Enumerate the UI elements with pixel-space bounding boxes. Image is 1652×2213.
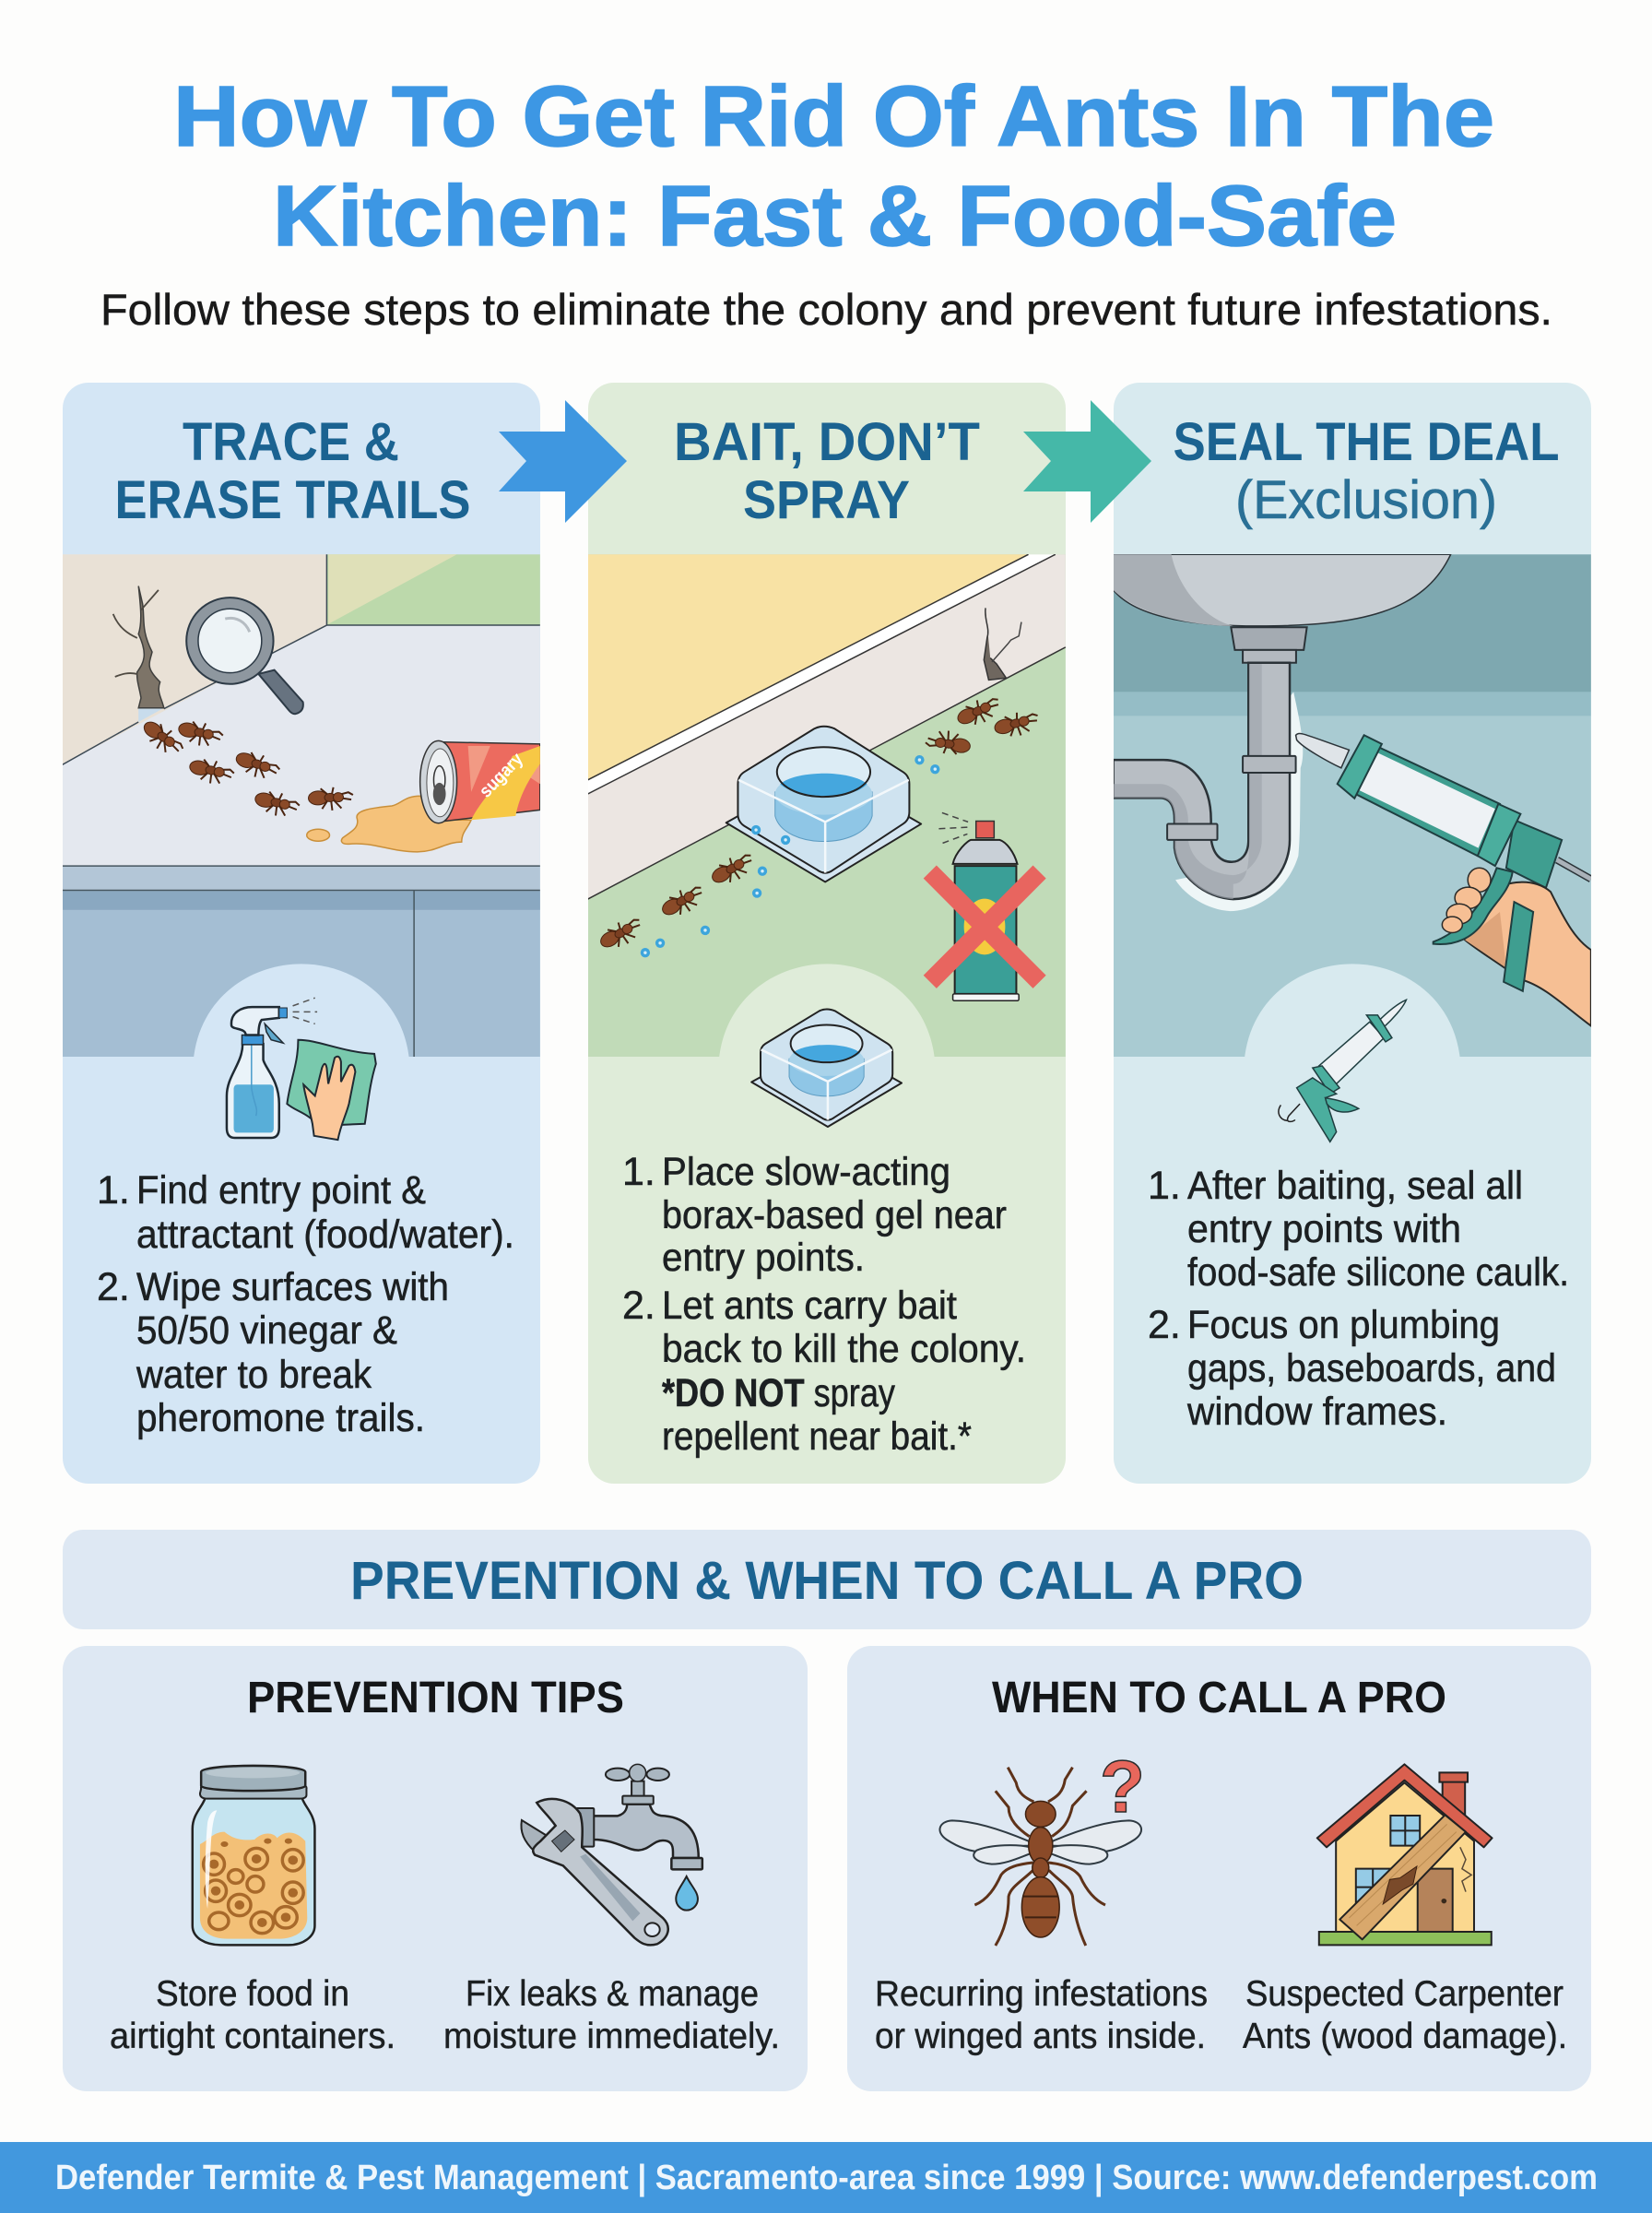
illustration: sink pipe and caulk gun — [1114, 554, 1591, 1059]
caption: fix leaks: Fix leaks & manage — [466, 1974, 759, 2014]
steps list: food-safe silicone caulk. — [1187, 1250, 1569, 1295]
steps list: 2. — [97, 1265, 130, 1309]
steps list: pheromone trails. — [136, 1396, 425, 1440]
panel: trace and erase trails — [63, 383, 540, 1484]
caption: recurring infestations: or winged ants inside. — [875, 2017, 1206, 2056]
caption: carpenter ants — [1243, 1974, 1567, 2056]
steps list: Focus on plumbing — [1187, 1303, 1500, 1347]
steps list: 1. — [97, 1168, 130, 1213]
heading: seal the deal (exclusion): (Exclusion) — [1235, 470, 1497, 530]
panel background — [63, 1646, 808, 2091]
steps list: water to break — [136, 1353, 372, 1397]
caption: recurring infestations: Recurring infestations — [875, 1974, 1208, 2014]
steps list: 50/50 vinegar & — [136, 1308, 397, 1353]
heading: prevention tips: PREVENTION TIPS — [247, 1674, 624, 1722]
heading: seal the deal (exclusion): SEAL THE DEAL — [1173, 412, 1560, 472]
icon: small caulk gun — [1279, 1000, 1406, 1142]
caption: recurring infestations — [875, 1974, 1208, 2056]
subtitle: Follow these steps to eliminate the colony and prevent future infestations. — [100, 285, 1552, 334]
icon: spray bottle and cloth — [227, 998, 376, 1140]
caption: carpenter ants: Ants (wood damage). — [1243, 2017, 1567, 2056]
illustration: bait station and baseboard — [588, 554, 1066, 1059]
title: Kitchen: Fast & Food-Safe — [273, 168, 1397, 264]
icon: winged ant with question mark — [939, 1746, 1145, 1946]
heading: trace and erase trails — [114, 412, 470, 530]
steps list: entry points. — [662, 1236, 865, 1280]
caption: store food: Store food in — [156, 1974, 349, 2014]
steps list: Let ants carry bait — [662, 1284, 957, 1328]
card background blue — [63, 383, 540, 1484]
steps list — [1148, 1164, 1569, 1434]
caption: fix leaks: moisture immediately. — [443, 2017, 780, 2056]
card background teal — [1114, 383, 1591, 1484]
steps list: attractant (food/water). — [136, 1213, 514, 1257]
illustration: kitchen counter with ant trail — [63, 554, 540, 1058]
steps list: 2. — [1148, 1303, 1181, 1347]
heading: when to call a pro: WHEN TO CALL A PRO — [992, 1674, 1446, 1722]
card background green — [588, 383, 1066, 1484]
heading: seal the deal (exclusion) — [1173, 412, 1560, 530]
steps list: After baiting, seal all — [1187, 1164, 1523, 1208]
steps list: back to kill the colony. — [662, 1327, 1026, 1371]
steps list: Find entry point & — [136, 1168, 426, 1213]
caption: store food — [110, 1974, 395, 2056]
icon: wrench and leaky faucet — [521, 1764, 702, 1945]
caption: store food: airtight containers. — [110, 2017, 395, 2056]
caption: fix leaks — [443, 1974, 780, 2056]
footer bar — [0, 2142, 1652, 2213]
heading: bait, don't spray — [674, 412, 980, 530]
steps list: entry points with — [1187, 1207, 1461, 1251]
steps list: repellent near bait.* — [662, 1414, 972, 1459]
steps list — [97, 1168, 514, 1440]
section banner: prevention and when to call a pro — [63, 1530, 1591, 1629]
steps list: 1. — [622, 1150, 655, 1194]
steps list: window frames. — [1186, 1390, 1447, 1434]
icon: winged ant with question mark: ? — [1100, 1746, 1145, 1828]
caption: carpenter ants: Suspected Carpenter — [1245, 1974, 1564, 2014]
arrow: blue, step 1 to step 2 — [499, 400, 627, 523]
steps list: *DO NOT spray — [662, 1371, 895, 1415]
title: How To Get Rid Of Ants In The — [173, 68, 1494, 164]
steps list — [622, 1150, 1026, 1459]
steps list: gaps, baseboards, and — [1187, 1346, 1556, 1391]
steps list: Wipe surfaces with — [136, 1265, 449, 1309]
panel: when to call a pro — [847, 1646, 1591, 2091]
heading: trace and erase trails: ERASE TRAILS — [114, 470, 470, 530]
panel: bait, don't spray — [588, 383, 1066, 1484]
section banner: prevention and when to call a pro: PREVENTION & WHEN TO CALL A PRO — [350, 1551, 1304, 1611]
heading: trace and erase trails: TRACE & — [183, 412, 399, 472]
icon: small bait station — [751, 1009, 902, 1127]
can label: sugary — [476, 749, 527, 801]
panel: prevention tips — [63, 1646, 808, 2091]
arrow: teal, step 2 to step 3 — [1023, 400, 1151, 523]
heading: bait, don't spray: SPRAY — [743, 470, 910, 530]
steps list: Place slow-acting — [662, 1150, 950, 1194]
steps list: 1. — [1148, 1164, 1181, 1208]
panel background — [847, 1646, 1591, 2091]
steps list: 2. — [622, 1284, 655, 1328]
title — [173, 68, 1494, 264]
icon: airtight jar of cereal — [193, 1766, 314, 1945]
heading: bait, don't spray: BAIT, DON’T — [674, 412, 980, 472]
steps list: borax-based gel near — [662, 1193, 1007, 1237]
panel: seal the deal — [1114, 383, 1591, 1484]
icon: house with damaged wood beam — [1317, 1764, 1493, 1945]
